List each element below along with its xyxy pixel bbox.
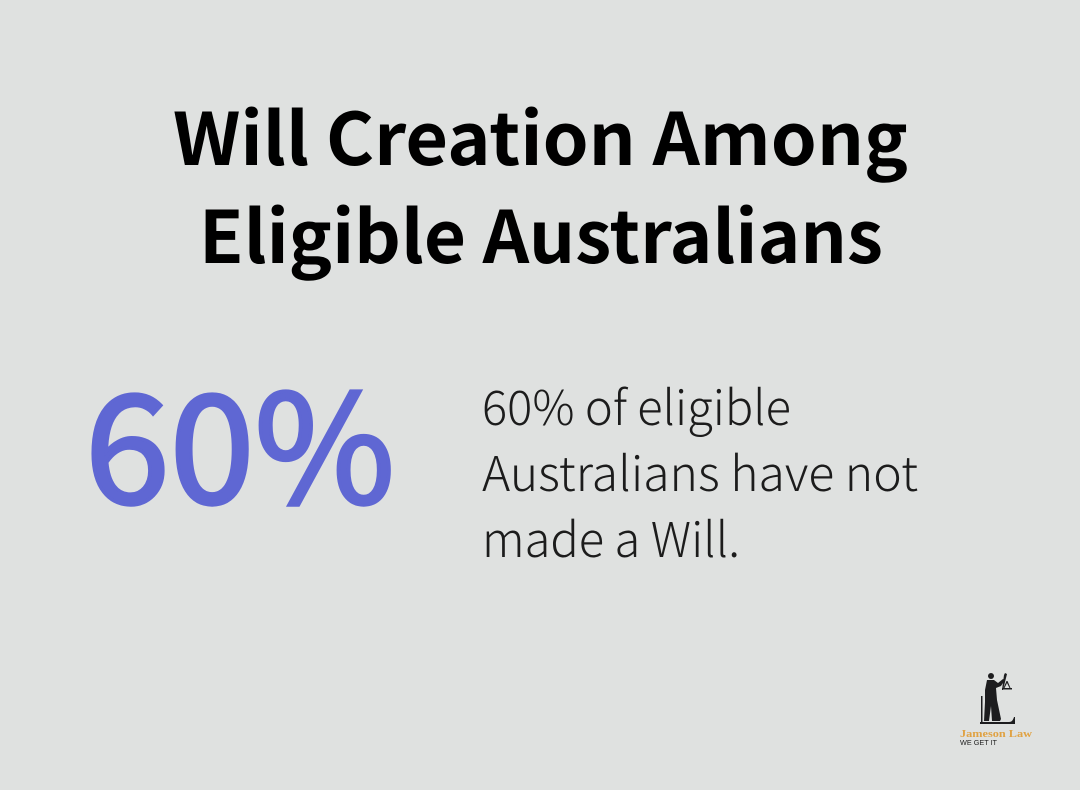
logo: Jameson Law [960,673,1032,747]
statement text: 60% of eligible [482,369,791,439]
big statistic: 60%: 60% [85,330,395,547]
title: Eligible Australians [199,179,883,284]
title: Will Creation Among [173,81,908,186]
title [173,81,908,284]
logo tagline: WE GET IT [960,740,998,747]
statement text: made a Will. [482,501,740,571]
statement text [482,369,918,571]
icon: lady justice figure [980,673,1015,724]
statement text: Australians have not [482,435,918,505]
logo name: Jameson Law [960,729,1032,740]
